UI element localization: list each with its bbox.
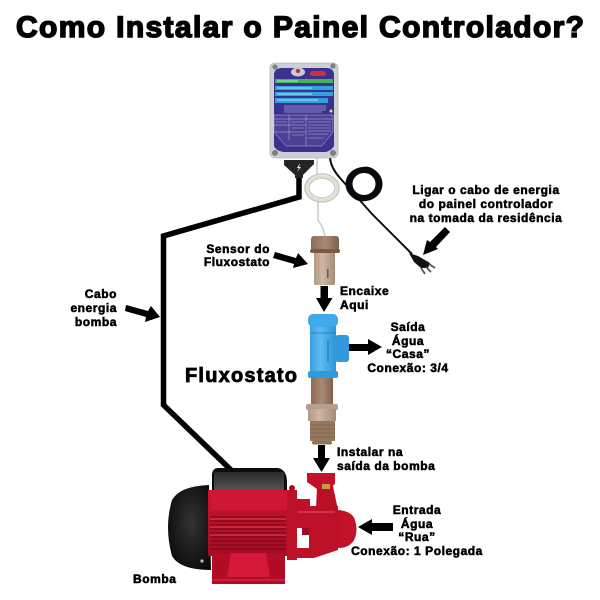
label: encaixe: Encaixe xyxy=(340,284,389,298)
label: ligar: do painel controlador xyxy=(419,197,553,211)
controller panel xyxy=(270,63,338,158)
cable gland connector with lightning xyxy=(284,160,314,178)
label: entrada: Água xyxy=(401,516,433,531)
panel label face xyxy=(274,68,334,152)
label: entrada: Entrada xyxy=(393,503,441,517)
arrow: encaixe xyxy=(316,286,332,312)
label: ligar: na tomada da residência xyxy=(410,211,562,225)
label: entrada: “Rua” xyxy=(398,530,436,544)
label: sensor: Sensor do xyxy=(206,242,270,256)
label: instalar: saída da bomba xyxy=(337,459,435,473)
label: ligar: Ligar o cabo de energia xyxy=(412,183,560,197)
inlet xyxy=(338,510,356,548)
label: cabo: energia xyxy=(70,301,117,315)
pump head xyxy=(287,490,338,560)
label: sensor: Fluxostato xyxy=(204,255,270,269)
sensor do fluxostato xyxy=(310,236,340,285)
label: saida: “Casa” xyxy=(386,347,430,361)
motor end cap xyxy=(168,485,211,570)
arrow: saida da bomba xyxy=(313,445,330,472)
fluxostato tee and adapter xyxy=(306,314,349,444)
motor body xyxy=(208,490,288,556)
label: bomba: Bomba xyxy=(133,572,176,586)
title: Como Instalar o Painel Controlador? xyxy=(16,11,584,44)
label: cabo: bomba xyxy=(75,315,117,329)
arrow: tomada xyxy=(423,227,450,255)
power cord and plug xyxy=(330,158,435,274)
label: saida: Saída xyxy=(391,320,425,334)
label: fluxostato: Fluxostato xyxy=(185,365,297,387)
arrow: cabo energia bomba xyxy=(125,305,160,322)
outlet xyxy=(316,486,338,510)
label: entrada: Conexão: 1 Polegada xyxy=(351,544,483,558)
white sensor cable and coil xyxy=(305,158,339,237)
label: saida: Água xyxy=(392,333,424,348)
arrow: entrada rua xyxy=(358,519,393,535)
pump power cable xyxy=(164,172,299,470)
label: saida: Conexão: 3/4 xyxy=(367,361,449,375)
label: cabo: Cabo xyxy=(85,287,117,301)
label: encaixe: Aqui xyxy=(340,298,369,312)
terminal box xyxy=(212,468,287,491)
pump xyxy=(168,468,356,584)
arrow: sensor xyxy=(273,252,308,268)
foot xyxy=(212,553,285,584)
arrow: saida casa xyxy=(349,339,382,355)
label: instalar: Instalar na xyxy=(337,445,403,459)
